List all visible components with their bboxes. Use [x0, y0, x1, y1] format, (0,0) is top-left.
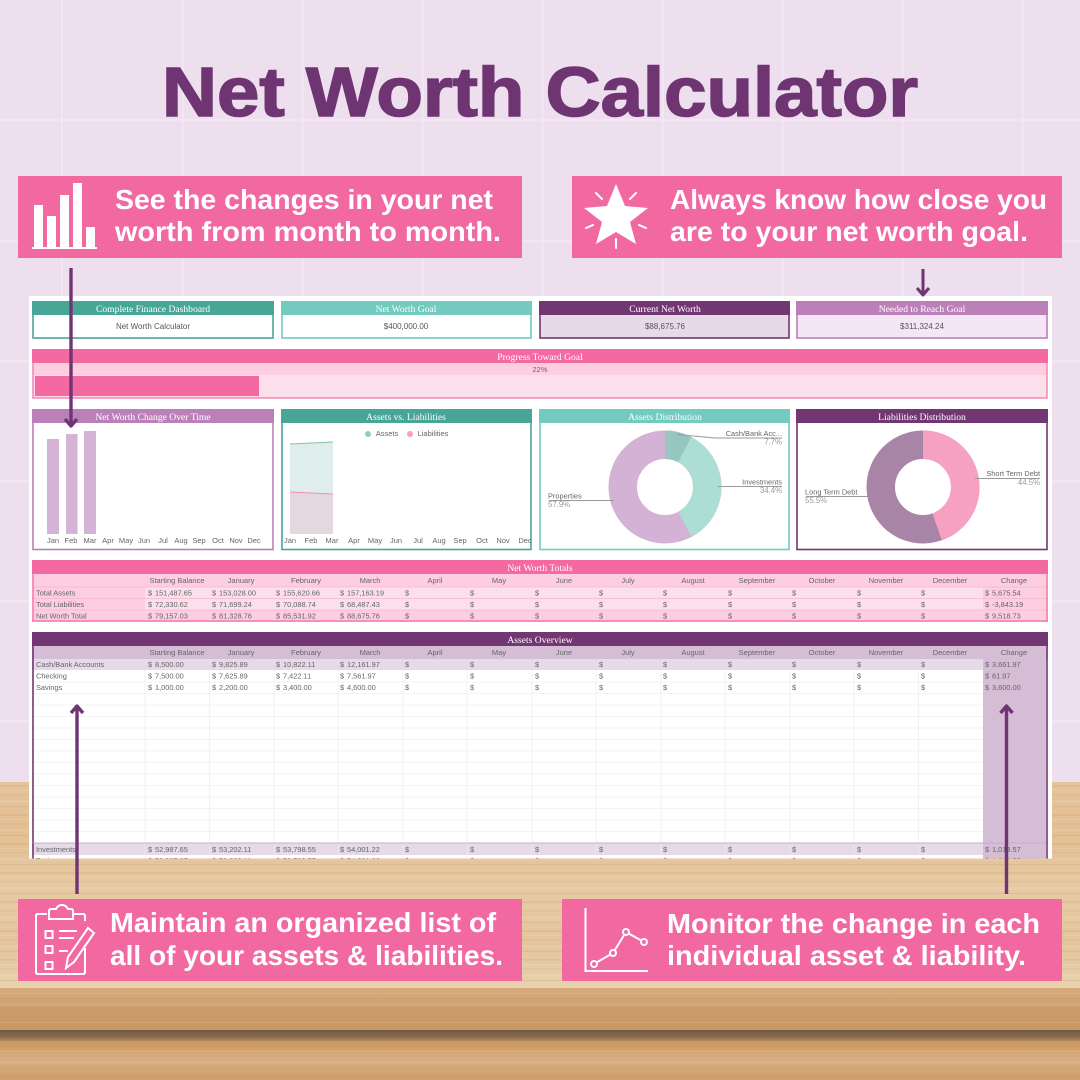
table: assets overview: 10,822.11 [283, 660, 315, 669]
table: assets overview: $ [921, 660, 925, 669]
table: assets overview: $ [340, 845, 344, 854]
table: assets overview: $ [148, 683, 152, 692]
table: assets overview: February [291, 648, 321, 657]
table: assets overview: Retirement [36, 856, 72, 865]
icon: clipboard with pencil [36, 905, 94, 974]
table: assets overview: 53,798.55 [283, 856, 316, 865]
chart: assets vs liabilities: Jun [390, 536, 402, 545]
table: net worth totals: $ [792, 588, 796, 598]
table: assets overview: $ [340, 856, 344, 865]
table: net worth totals: January [228, 576, 255, 585]
card: current net worth: $88,675.76 [645, 322, 686, 331]
panel: progress toward goal [32, 349, 1048, 398]
table: net worth totals: Net Worth Totals [507, 563, 573, 574]
chart: net worth change over time: May [119, 536, 133, 545]
table: assets overview: $ [470, 672, 474, 680]
table: net worth totals: $ [470, 588, 474, 598]
table: assets overview: $ [857, 672, 861, 680]
table: assets overview: $ [663, 845, 667, 854]
table: assets overview: $ [405, 683, 409, 692]
table: net worth totals: $ [599, 600, 603, 609]
table: assets overview: $ [405, 660, 409, 669]
table: net worth totals: $ [663, 588, 667, 598]
table: assets overview: 12,161.97 [347, 660, 380, 669]
table: assets overview: $ [792, 856, 796, 865]
table: assets overview: $ [921, 672, 925, 680]
table: assets overview: $ [212, 672, 216, 680]
table: assets overview: $ [857, 660, 861, 669]
chart: liabilities distribution donut: Liabilities Distribution [878, 412, 966, 423]
table: assets overview: $ [148, 856, 152, 865]
table: assets overview: $ [728, 672, 732, 680]
table: assets overview: January [228, 648, 255, 657]
callout: goal [572, 176, 1062, 258]
table: assets overview: $ [921, 856, 925, 865]
table: net worth totals: February [291, 576, 321, 585]
table: net worth totals: $ [340, 612, 344, 620]
callout text: month to month: worth from month to month. [114, 216, 501, 247]
chart: assets vs liabilities: Oct [476, 536, 489, 545]
table: assets overview: $ [212, 683, 216, 692]
table: assets overview: 3,661.97 [992, 660, 1021, 669]
table: assets overview: 3,600.00 [992, 683, 1021, 692]
table: assets overview: $ [470, 856, 474, 865]
table: net worth totals: $ [148, 612, 152, 620]
table: assets overview: $ [792, 683, 796, 692]
table: net worth totals: $ [985, 600, 989, 609]
table: net worth totals: $ [663, 612, 667, 620]
progress bar [35, 376, 259, 396]
table: net worth totals: 79,157.03 [155, 612, 188, 620]
table: net worth totals: $ [599, 588, 603, 598]
table: assets overview: Starting Balance [149, 648, 205, 657]
table: net worth totals: July [621, 576, 635, 585]
table: assets overview: $ [276, 683, 280, 692]
chart: net worth change over time: Jun [138, 536, 150, 545]
table: assets overview: $ [212, 856, 216, 865]
table: assets overview [32, 632, 1048, 865]
chart: assets vs liabilities: May [368, 536, 382, 545]
chart: assets distribution donut: Cash/Bank Acc... [726, 429, 782, 438]
table: net worth totals: August [681, 576, 706, 585]
table: net worth totals: November [869, 576, 904, 585]
table: assets overview: 7,561.97 [347, 672, 376, 680]
chart: liabilities distribution donut: Long Term Debt [805, 488, 857, 496]
table: assets overview: $ [535, 683, 539, 692]
table: net worth totals: -3,843.19 [992, 600, 1023, 609]
table: net worth totals: $ [663, 600, 667, 609]
chart: assets vs liabilities: Mar [326, 536, 339, 545]
table: net worth totals: $ [985, 588, 989, 598]
table: net worth totals: Total Assets [36, 588, 76, 598]
table: net worth totals: October [809, 576, 836, 585]
chart: assets vs liabilities: Feb [305, 536, 317, 545]
table: net worth totals: $ [921, 600, 925, 609]
table: net worth totals: $ [921, 588, 925, 598]
chart: net worth change over time: Jul [158, 536, 168, 545]
callout: individual change [562, 899, 1062, 981]
table: assets overview: $ [535, 845, 539, 854]
table: net worth totals: $ [276, 600, 280, 609]
table: assets overview: $ [212, 660, 216, 669]
table: assets overview: $ [985, 672, 989, 680]
table: assets overview: June [556, 648, 572, 657]
table: assets overview: 3,400.00 [283, 683, 312, 692]
table: assets overview: $ [340, 660, 344, 669]
table: net worth totals: $ [340, 600, 344, 609]
icon: line chart [586, 908, 648, 971]
table: assets overview: $ [599, 845, 603, 854]
table: net worth totals: April [427, 576, 443, 585]
table: assets overview: $ [857, 856, 861, 865]
chart: net worth change over time: Mar [84, 536, 97, 545]
card: net worth goal [281, 301, 532, 338]
table: assets overview: $ [405, 845, 409, 854]
table: assets overview: $ [792, 672, 796, 680]
table: assets overview: $ [792, 845, 796, 854]
table: assets overview: 54,001.22 [347, 856, 380, 865]
table: net worth totals: $ [405, 612, 409, 620]
table: net worth totals: 85,531.92 [283, 612, 316, 620]
chart: assets vs liabilities: Sep [453, 536, 467, 545]
table: net worth totals: 81,328.76 [219, 612, 252, 620]
table: assets overview: 9,825.89 [219, 660, 248, 669]
table: net worth totals: $ [792, 600, 796, 609]
table: net worth totals: $ [857, 600, 861, 609]
arrow: to asset list [71, 706, 83, 894]
table: net worth totals: $ [728, 588, 732, 598]
callout text: organized list: all of your assets & liabilities. [110, 940, 503, 971]
table: net worth totals: 9,518.73 [992, 612, 1021, 620]
table: net worth totals: $ [535, 600, 539, 609]
chart: assets distribution donut: Investments [742, 478, 782, 486]
chart: net worth change over time: Feb [65, 536, 77, 545]
table: assets overview: April [427, 648, 443, 657]
table: assets overview: $ [340, 672, 344, 680]
table: net worth totals: $ [148, 600, 152, 609]
table: net worth totals: $ [728, 600, 732, 609]
table: net worth totals: $ [148, 588, 152, 598]
chart: assets vs liabilities: Jul [413, 536, 423, 545]
table: assets overview: 1,013.57 [992, 856, 1021, 865]
callout text: organized list: Maintain an organized list of [110, 907, 497, 938]
table: assets overview: March [360, 648, 380, 657]
table: assets overview: 1,013.57 [992, 845, 1021, 854]
chart: net worth change over time: Net Worth Change Over Time [95, 412, 211, 423]
chart: net worth change over time: Dec [247, 536, 261, 545]
table: assets overview: $ [663, 672, 667, 680]
callout: month to month [18, 176, 522, 258]
table: assets overview: 53,798.55 [283, 845, 316, 854]
table: assets overview: $ [599, 856, 603, 865]
table: assets overview: $ [599, 672, 603, 680]
table: assets overview: December [933, 648, 968, 657]
table: assets overview: $ [728, 683, 732, 692]
table: assets overview: Savings [36, 683, 63, 692]
chart: liabilities distribution donut [796, 409, 1048, 550]
table: net worth totals: $ [599, 612, 603, 620]
table: assets overview: $ [276, 660, 280, 669]
callout text: individual change: individual asset & liability. [667, 940, 1026, 971]
table: assets overview: July [621, 648, 635, 657]
chart: assets distribution donut: 7.7% [764, 438, 782, 446]
table: net worth totals: 5,675.54 [992, 588, 1021, 598]
table: net worth totals: September [739, 576, 776, 585]
table: net worth totals: 88,675.76 [347, 612, 380, 620]
card: complete finance dashboard [32, 301, 274, 338]
table: net worth totals: Net Worth Total [36, 612, 87, 620]
table: assets overview: $ [599, 683, 603, 692]
arrow: to bar chart [65, 268, 77, 426]
table: net worth totals: June [556, 576, 572, 585]
table: assets overview: November [869, 648, 904, 657]
table: assets overview: $ [470, 845, 474, 854]
table: assets overview: $ [148, 845, 152, 854]
chart: net worth change over time: Apr [102, 536, 114, 545]
table: net worth totals: $ [857, 612, 861, 620]
wooden shelf [0, 782, 1080, 1080]
table: assets overview: $ [921, 683, 925, 692]
table: assets overview: $ [535, 660, 539, 669]
table: assets overview: $ [663, 660, 667, 669]
table: assets overview: $ [405, 856, 409, 865]
spreadsheet dashboard [29, 296, 1052, 865]
table: assets overview: $ [148, 672, 152, 680]
chart: assets vs liabilities: Assets [376, 429, 398, 438]
table: net worth totals: $ [535, 588, 539, 598]
table: net worth totals: $ [921, 612, 925, 620]
panel: progress toward goal: 22% [532, 365, 548, 374]
table: assets overview: 2,200.00 [219, 683, 248, 692]
table: assets overview: $ [728, 845, 732, 854]
table: net worth totals: 155,620.66 [283, 588, 320, 598]
table: assets overview: $ [470, 683, 474, 692]
table: assets overview: $ [985, 856, 989, 865]
card: net worth goal: $400,000.00 [384, 322, 429, 331]
callout text: individual change: Monitor the change in each [667, 908, 1040, 939]
table: assets overview: 7,422.11 [283, 672, 311, 680]
table: assets overview: August [681, 648, 706, 657]
chart: assets vs liabilities: Jan [284, 536, 296, 545]
table: assets overview: Assets Overview [507, 635, 573, 646]
table: assets overview: $ [599, 660, 603, 669]
background wall [0, 0, 1080, 790]
card: complete finance dashboard: Net Worth Calculator [116, 322, 190, 331]
card: current net worth [539, 301, 790, 338]
table: net worth totals: 153,028.00 [219, 588, 256, 598]
table: assets overview: 7,625.89 [219, 672, 248, 680]
chart: assets distribution donut: Properties [548, 492, 582, 500]
table: assets overview: May [492, 648, 506, 657]
table: assets overview: $ [405, 672, 409, 680]
table: net worth totals: 68,487.43 [347, 600, 380, 609]
chart: assets distribution donut: Assets Distribution [628, 412, 702, 423]
chart: net worth change over time [32, 409, 274, 550]
chart: assets vs liabilities: Assets vs. Liabilities [366, 412, 446, 423]
table: net worth totals: Change [1001, 576, 1027, 585]
table: assets overview: $ [985, 845, 989, 854]
chart: net worth change over time: Nov [229, 536, 243, 545]
card: needed to reach goal: $311,324.24 [900, 322, 944, 331]
table: net worth totals: March [360, 576, 380, 585]
chart: net worth change over time: Jan [47, 536, 59, 545]
table: assets overview: $ [212, 845, 216, 854]
table: assets overview: 54,001.22 [347, 845, 380, 854]
table: assets overview: Checking [36, 672, 67, 680]
chart: assets vs liabilities: Apr [348, 536, 360, 545]
table: net worth totals: $ [212, 600, 216, 609]
card: complete finance dashboard: Complete Finance Dashboard [96, 304, 210, 315]
table: net worth totals: 72,330.62 [155, 600, 188, 609]
table: assets overview: $ [857, 845, 861, 854]
table: assets overview: $ [470, 660, 474, 669]
table: net worth totals: May [492, 576, 506, 585]
table: net worth totals: $ [276, 588, 280, 598]
table: net worth totals: $ [535, 612, 539, 620]
table: assets overview: $ [340, 683, 344, 692]
table: net worth totals: $ [340, 588, 344, 598]
card: current net worth: Current Net Worth [629, 304, 701, 315]
table: net worth totals: $ [470, 612, 474, 620]
icon: bar chart [32, 183, 97, 249]
table: assets overview: $ [857, 683, 861, 692]
chart: liabilities distribution donut: 55.5% [805, 496, 827, 505]
chart: net worth change over time: Aug [174, 536, 188, 545]
table: assets overview: 52,987.65 [155, 856, 188, 865]
table: assets overview: October [809, 648, 836, 657]
table: net worth totals: $ [276, 612, 280, 620]
table: assets overview: 52,987.65 [155, 845, 188, 854]
table: net worth totals: $ [405, 588, 409, 598]
table: net worth totals: 71,699.24 [219, 600, 252, 609]
chart: assets vs liabilities: Dec [518, 536, 532, 545]
table: assets overview: 61.97 [992, 672, 1010, 680]
table: net worth totals: December [933, 576, 968, 585]
chart: assets vs liabilities: Aug [432, 536, 446, 545]
table: net worth totals [32, 560, 1048, 622]
table: assets overview: $ [276, 845, 280, 854]
table: assets overview: $ [728, 856, 732, 865]
chart: liabilities distribution donut: Short Term Debt [986, 469, 1040, 478]
table: assets overview: $ [985, 660, 989, 669]
icon: star with sparkles [584, 184, 648, 248]
arrow: to change column [1000, 706, 1012, 894]
table: assets overview: 1,000.00 [155, 683, 184, 692]
table: assets overview: $ [276, 672, 280, 680]
chart: assets vs liabilities: Liabilities [418, 429, 449, 438]
callout: organized list [18, 899, 522, 981]
table: assets overview: Cash/Bank Accounts [36, 660, 105, 669]
table: assets overview: $ [921, 845, 925, 854]
table: net worth totals: $ [728, 612, 732, 620]
chart: liabilities distribution donut: 44.5% [1018, 478, 1040, 487]
table: net worth totals: 157,163.19 [347, 588, 384, 598]
chart: assets vs liabilities: Nov [496, 536, 510, 545]
arrow: to needed to reach goal [917, 269, 929, 295]
table: net worth totals: $ [405, 600, 409, 609]
table: net worth totals: $ [857, 588, 861, 598]
table: net worth totals: Starting Balance [149, 576, 205, 585]
callout text: month to month: See the changes in your net [115, 184, 493, 215]
table: assets overview: $ [985, 683, 989, 692]
card: needed to reach goal: Needed to Reach Goal [879, 304, 966, 315]
table: assets overview: $ [535, 672, 539, 680]
table: assets overview: $ [276, 856, 280, 865]
callout text: goal: are to your net worth goal. [670, 216, 1028, 247]
chart: assets distribution donut [539, 409, 790, 550]
table: assets overview: $ [663, 856, 667, 865]
table: assets overview: September [739, 648, 776, 657]
chart: assets distribution donut: 57.9% [548, 500, 570, 509]
chart: assets vs liabilities [281, 409, 532, 550]
table: assets overview: $ [728, 660, 732, 669]
chart: assets distribution donut: 34.4% [760, 486, 782, 495]
title: Net Worth Calculator [162, 53, 918, 131]
card: net worth goal: Net Worth Goal [376, 304, 437, 315]
callout text: goal: Always know how close you [670, 184, 1047, 215]
table: net worth totals: 151,487.65 [155, 588, 192, 598]
table: assets overview: 53,202.11 [219, 856, 251, 865]
table: net worth totals: $ [212, 588, 216, 598]
table: assets overview: $ [663, 683, 667, 692]
table: net worth totals: 70,088.74 [283, 600, 316, 609]
table: assets overview: Change [1001, 648, 1027, 657]
table: net worth totals: $ [212, 612, 216, 620]
table: assets overview: $ [535, 856, 539, 865]
table: assets overview: 8,500.00 [155, 660, 184, 669]
panel: progress toward goal: Progress Toward Goal [497, 352, 583, 363]
table: assets overview: Investments [36, 845, 76, 854]
table: assets overview: $ [792, 660, 796, 669]
table: net worth totals: $ [470, 600, 474, 609]
table: net worth totals: $ [985, 612, 989, 620]
table: net worth totals: Total Liabilities [36, 600, 84, 609]
table: assets overview: 53,202.11 [219, 845, 251, 854]
chart: net worth change over time: Sep [192, 536, 206, 545]
chart: net worth change over time: Oct [212, 536, 225, 545]
table: assets overview: $ [148, 660, 152, 669]
table: assets overview: 7,500.00 [155, 672, 184, 680]
table: net worth totals: $ [792, 612, 796, 620]
table: assets overview: 4,600.00 [347, 683, 376, 692]
card: needed to reach goal [796, 301, 1048, 338]
